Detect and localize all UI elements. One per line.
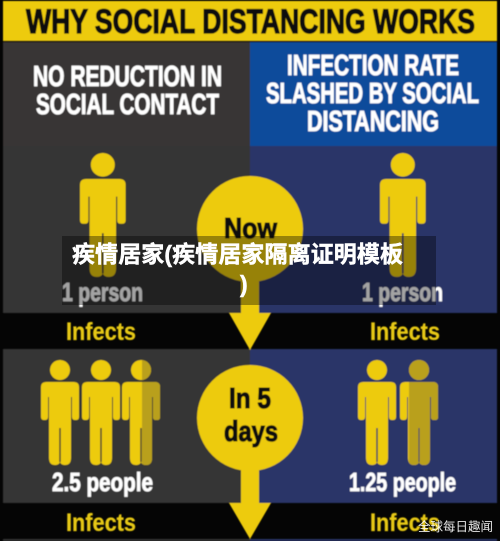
overlay caption — [62, 236, 436, 305]
icon: person — [80, 153, 126, 277]
panel: row two left — [3, 349, 250, 503]
arrow: in 5 days: days — [224, 416, 278, 448]
label: 1.25 people: 1.25 people — [349, 467, 456, 497]
overlay caption: 疾情居家(疾情居家隔离证明模板 — [72, 241, 403, 267]
arrow: now: Now — [224, 213, 277, 245]
label: 1 person right: 1 person — [362, 277, 443, 307]
label: 2.5 people: 2.5 people — [52, 467, 153, 497]
arrow: now — [197, 176, 303, 350]
label: infects row two left: Infects — [66, 509, 136, 537]
icon: 2.5 people — [41, 360, 160, 465]
label: infects row two right: Infects — [370, 509, 440, 537]
icon: 1.25 people — [358, 360, 438, 465]
label: infects row one left: Infects — [66, 318, 136, 346]
label: infects row one right: Infects — [370, 318, 440, 346]
overlay caption: ) — [240, 271, 248, 297]
arrow: in 5 days — [197, 365, 303, 539]
panel: no reduction heading — [3, 42, 250, 146]
bottom edge panels — [3, 539, 497, 541]
panel: infection rate heading: DISTANCING — [307, 106, 439, 138]
arrow: in 5 days: In 5 — [229, 383, 271, 415]
panel: row one left — [3, 146, 250, 313]
panel: infection rate heading — [250, 42, 497, 146]
panel: no reduction heading: SOCIAL CONTACT — [36, 89, 219, 121]
panel: row two right — [250, 349, 497, 503]
icon: person — [380, 153, 426, 277]
panel: no reduction heading: NO REDUCTION IN — [33, 61, 222, 93]
label: 1 person left: 1 person — [62, 277, 143, 307]
watermark: 全球每日趣闻 — [418, 519, 493, 534]
panel: row one right — [250, 146, 497, 313]
